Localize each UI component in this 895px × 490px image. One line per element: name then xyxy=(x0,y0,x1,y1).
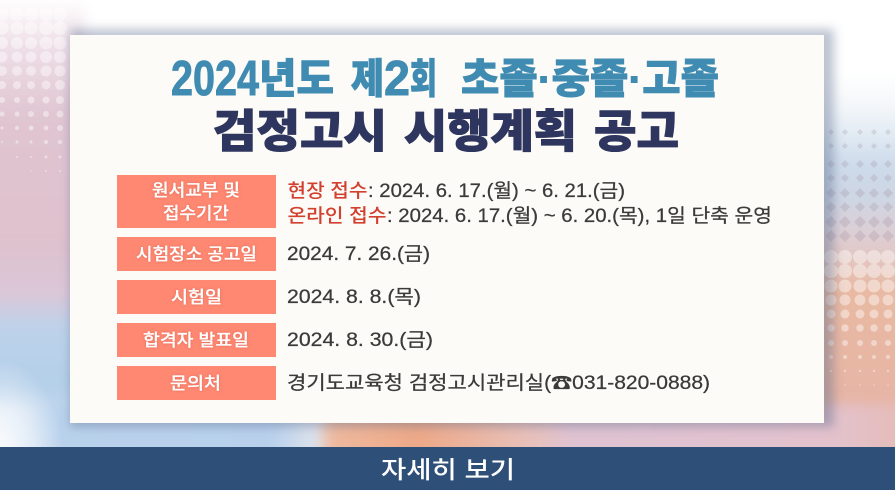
button bar: view details xyxy=(0,447,895,490)
row: venue announcement date xyxy=(117,237,430,271)
row: results date: 합격자 발표일 xyxy=(143,331,249,350)
row: results date: 2024. 8. 30.(금) xyxy=(287,330,433,351)
card shadow xyxy=(70,29,834,427)
row: exam date: 2024. 8. 8.(목) xyxy=(287,287,421,308)
title line 1: 회 xyxy=(410,56,437,102)
button bar: view details: 자세히 보기 xyxy=(381,457,515,484)
title line 1: 2 xyxy=(384,52,410,106)
row: application period: : 2024. 6. 17.(월) ~ 6. 20.(목), 1일 단축 운영 xyxy=(387,205,772,227)
row: contact: 문의처 xyxy=(170,374,221,393)
title line 2: 시행계획 xyxy=(404,106,577,157)
row: application period: : 2024. 6. 17.(월) ~ 6. 21.(금) xyxy=(368,180,625,202)
row: application period xyxy=(117,175,772,228)
row: exam date: 시험일 xyxy=(171,288,222,307)
row: application period: 원서교부 및 xyxy=(152,181,240,200)
title line 1: 2024 xyxy=(171,52,259,106)
title line 1: 년도 xyxy=(259,56,334,102)
row: exam date xyxy=(117,280,421,314)
title line 1: 초졸·중졸·고졸 xyxy=(461,56,719,102)
row: application period: 접수기간 xyxy=(163,204,229,223)
row: application period: 현장 접수 xyxy=(288,180,368,202)
title line 2 xyxy=(213,106,679,157)
row: contact xyxy=(117,366,710,400)
row: application period: 온라인 접수 xyxy=(288,205,386,227)
title line 1: 제 xyxy=(351,56,384,102)
row: contact: 경기도교육청 검정고시관리실(☎031-820-0888) xyxy=(287,372,710,394)
panel: notice card xyxy=(70,35,824,423)
row: venue announcement date: 2024. 7. 26.(금) xyxy=(287,244,430,265)
row: results date xyxy=(117,323,433,357)
title line 2: 공고 xyxy=(594,106,679,157)
title line 1 xyxy=(171,52,719,106)
row: venue announcement date: 시험장소 공고일 xyxy=(136,245,257,264)
title line 2: 검정고시 xyxy=(213,106,387,157)
